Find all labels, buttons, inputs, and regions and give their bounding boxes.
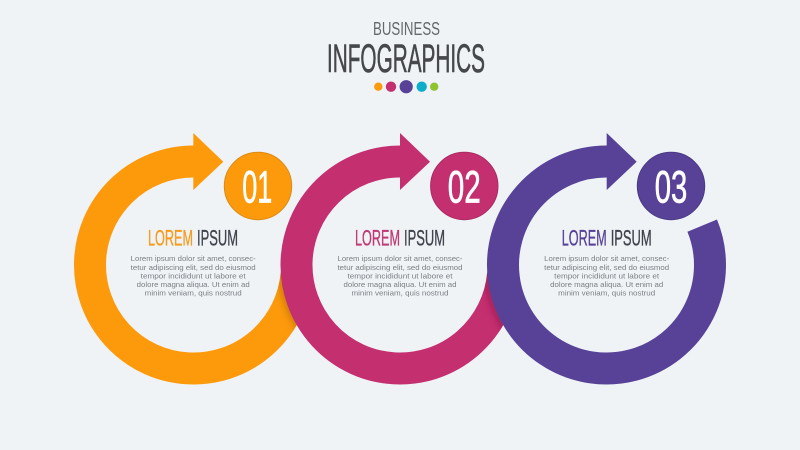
step 2 heading: LOREM	[355, 226, 400, 251]
step 1 circular arrow	[90, 133, 297, 368]
step 2 text	[338, 226, 463, 298]
step 3 body: tempor incididunt ut labore et	[554, 272, 659, 280]
step 1 body: tetur adipiscing elit, sed do eiusmod	[131, 263, 256, 272]
title block	[327, 19, 485, 93]
title: infographics: INFOGRAPHICS	[327, 37, 485, 81]
badge 02: 02	[448, 161, 481, 212]
step 1 heading: LOREM	[148, 226, 193, 251]
step 2 body	[338, 254, 463, 298]
subtitle: business: BUSINESS	[373, 19, 440, 39]
step 3 body: Lorem ipsum dolor sit amet, consec-	[544, 254, 670, 263]
step 3 body: minim veniam, quis nostrud	[558, 288, 655, 298]
step 2 body: Lorem ipsum dolor sit amet, consec-	[338, 254, 463, 263]
step 2 body: tetur adipiscing elit, sed do eiusmod	[338, 263, 462, 272]
step 2 body: tempor incididunt ut labore et	[348, 272, 452, 280]
step 3 body	[544, 254, 670, 298]
step 3 text	[544, 226, 670, 298]
step 1 text	[131, 226, 256, 298]
step 3 circular arrow	[503, 133, 710, 368]
step 2 heading: IPSUM	[404, 226, 445, 251]
step 1 body: Lorem ipsum dolor sit amet, consec-	[131, 254, 256, 263]
step 1 heading: IPSUM	[197, 226, 238, 251]
badge 03: 03	[655, 161, 687, 212]
badge 01	[224, 152, 292, 220]
badge 03	[637, 152, 705, 220]
step 2 body: dolore magna aliqua. Ut enim ad	[344, 280, 456, 289]
step 2 body: minim veniam, quis nostrud	[352, 288, 448, 298]
shadow of step 2 arrow on step 1	[278, 272, 297, 330]
badge 02	[431, 152, 498, 220]
step 1 body	[131, 254, 256, 298]
step 1 body: tempor incididunt ut labore et	[141, 272, 246, 280]
step 3 body: tetur adipiscing elit, sed do eiusmod	[544, 263, 669, 272]
step 2 circular arrow	[296, 133, 503, 368]
step 3 body: dolore magna aliqua. Ut enim ad	[550, 280, 663, 289]
step 3 heading: IPSUM	[611, 226, 652, 251]
step 3 heading: LOREM	[562, 226, 607, 251]
step 1 body: minim veniam, quis nostrud	[145, 288, 242, 298]
shadow of step 3 arrow on step 2	[484, 272, 504, 330]
colored dots	[374, 80, 438, 93]
badge 01: 01	[242, 161, 272, 212]
step 1 body: dolore magna aliqua. Ut enim ad	[137, 280, 250, 289]
